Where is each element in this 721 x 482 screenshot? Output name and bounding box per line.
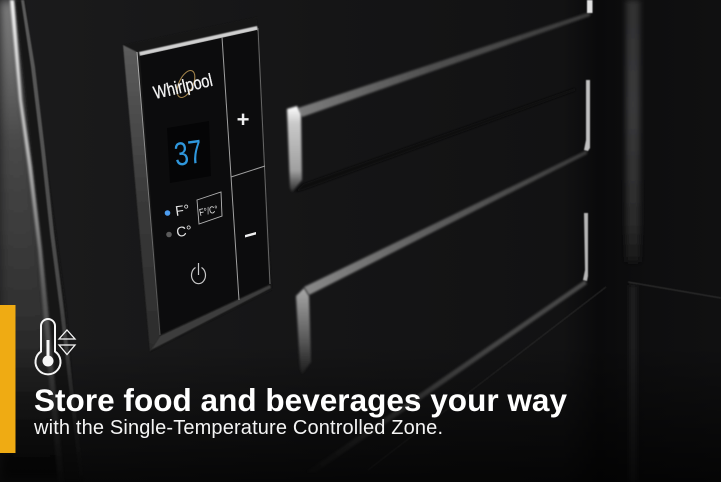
bottom shade xyxy=(0,345,721,482)
minus button xyxy=(245,232,256,238)
panel glass xyxy=(140,30,269,334)
F/C toggle button xyxy=(197,192,222,224)
Fahrenheit indicator xyxy=(165,201,190,219)
Celsius indicator xyxy=(166,222,193,240)
Celsius indicator: C° xyxy=(175,222,193,240)
control panel xyxy=(123,17,272,352)
shelf rail: top xyxy=(287,0,592,192)
power icon xyxy=(192,263,206,284)
heading: Store food and beverages your way xyxy=(34,382,567,418)
left stainless steel door trim xyxy=(0,0,84,482)
Whirlpool logo: Whirlpool xyxy=(151,70,214,103)
right cabinet corner post xyxy=(626,0,721,482)
panel bezel xyxy=(123,17,272,352)
temperature display xyxy=(167,121,211,183)
subheading: with the Single-Temperature Controlled Zone. xyxy=(33,417,443,439)
button divider lines xyxy=(222,37,265,300)
shelf rail: middle xyxy=(296,80,590,374)
Fahrenheit indicator: F° xyxy=(174,201,190,219)
shelf rail: bottom xyxy=(306,213,606,472)
F/C toggle button: F°/C° xyxy=(198,204,219,219)
icon: thermometer with up and down arrows xyxy=(36,319,75,374)
panel edge lines xyxy=(137,28,270,335)
plus button: + xyxy=(237,107,249,132)
temperature display: 37 xyxy=(172,132,205,173)
yellow accent bar xyxy=(0,305,16,453)
